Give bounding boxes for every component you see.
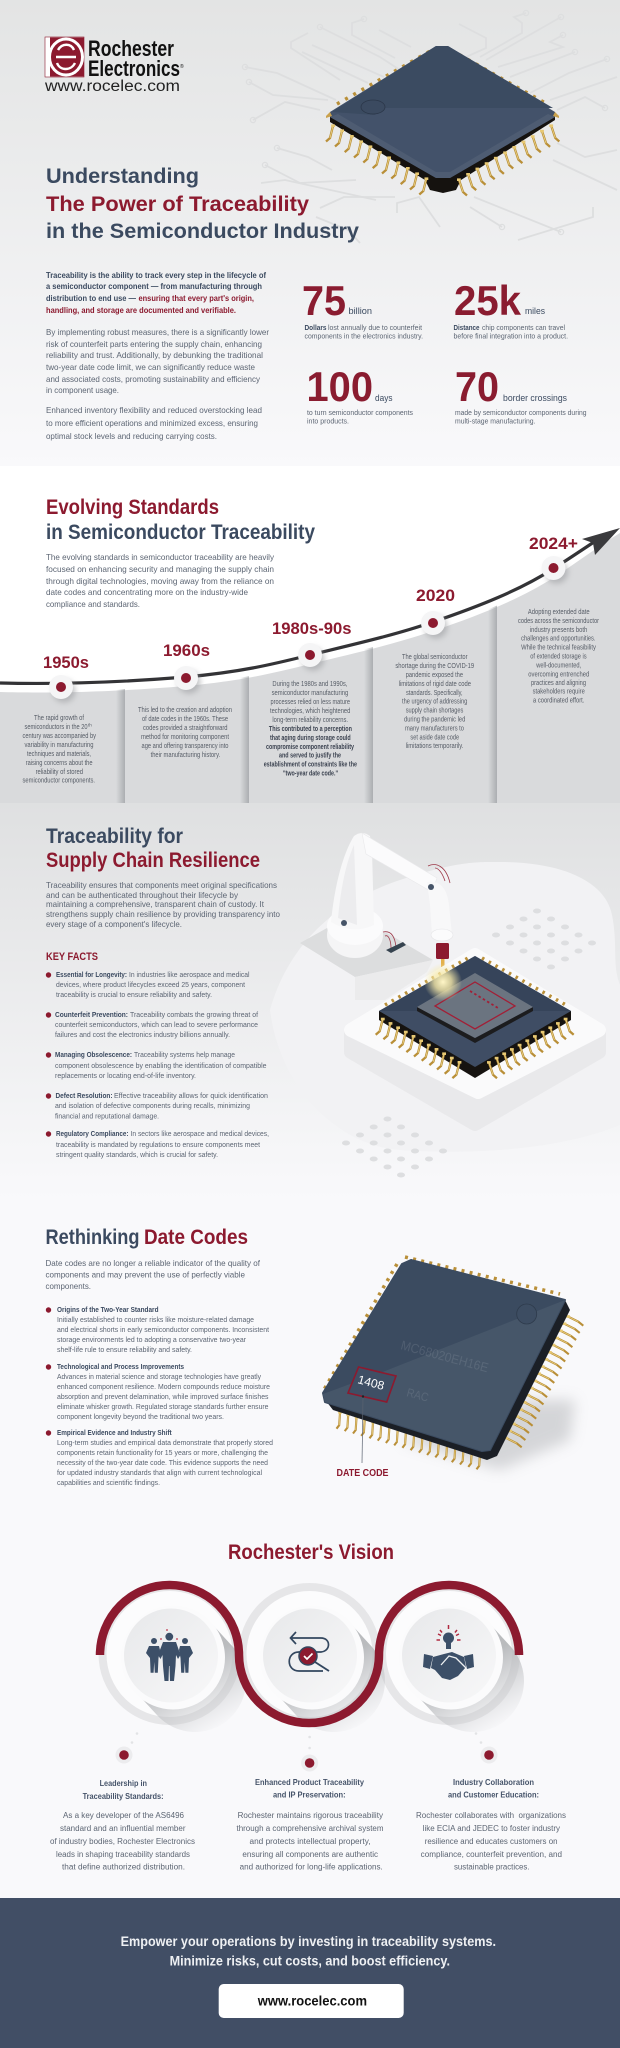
key fact: defect resolution: and isolation of defective components during recalls, minimizing: [55, 1101, 250, 1110]
timeline curve and arrow: [0, 528, 620, 688]
dot cluster lower: [342, 1116, 447, 1178]
timeline intro text: compliance and standards.: [46, 599, 140, 609]
stat: 25k miles: chip components can travel: [482, 323, 565, 332]
milestone: 2020: standards. Specifically,: [406, 690, 463, 697]
milestone: 1950s: century was accompanied by: [22, 733, 96, 740]
stat: 70 border crossings: multi-stage manufacturing.: [455, 416, 536, 426]
key fact: regulatory compliance: In sectors like aerospace and medical devices,: [130, 1129, 269, 1138]
milestone: 2020: shortage during the COVID-19: [395, 663, 474, 670]
supply chain intro text: strengthens supply chain resilience by providing transparency into: [46, 909, 280, 919]
disk: leadership icon: [121, 1606, 225, 1710]
milestone: 2020: set aside date code: [410, 734, 459, 742]
background blob: [270, 862, 620, 1152]
milestone: 2024+: codes across the semiconductor: [518, 618, 600, 625]
stat: 70 border crossings: 70: [455, 363, 499, 410]
bullet: empirical evidence: capabilities and scientific findings.: [57, 1478, 160, 1487]
stat: 75 billion: Dollars: [304, 323, 326, 332]
connector and text: industry collaboration: Rochester collaborates with organizations: [416, 1811, 566, 1820]
milestone: 1950s: variability in manufacturing: [24, 742, 94, 749]
supply chain intro text: and can be authenticated throughout their lifecycle by: [46, 890, 239, 900]
key fact: defect resolution: financial and reputational damage.: [55, 1112, 159, 1120]
supply chain intro text: [46, 880, 280, 929]
website button: www.rocelec.com: [257, 1994, 367, 2008]
connector and text: leadership: standard and an influential member: [60, 1824, 186, 1833]
key fact: longevity: traceability is crucial to ensure reliability and safety.: [56, 990, 212, 999]
milestone: 1950s: semiconductor components.: [22, 778, 95, 784]
connector and text: industry collaboration: resilience and educates customers on: [425, 1837, 558, 1846]
key facts heading: KEY FACTS: [46, 951, 98, 963]
key fact: longevity: [46, 970, 250, 999]
milestone: 1960s: age and offering transparency into: [142, 743, 229, 750]
heading: Rochester's Vision: [228, 1541, 394, 1564]
timeline intro text: date codes and concentrating more on the industry-wide: [46, 587, 248, 597]
milestone: 2020: limitations temporarily.: [406, 743, 463, 750]
intro text: a semiconductor component — from manufacturing through: [46, 281, 262, 291]
bullet: empirical evidence: necessity of the two-year date code. This evidence supports the need: [57, 1458, 268, 1467]
key fact: obsolescence: Managing Obsolescence:: [55, 1050, 132, 1059]
key fact: counterfeit prevention: failures and cost the electronics industry billions annually.: [55, 1030, 230, 1039]
stat: 25k miles: miles: [525, 306, 545, 317]
milestone: 2020: The global semiconductor: [402, 654, 468, 661]
stat: 100 days: days: [375, 393, 393, 404]
bullet: origins: storage environments led to adopting a conservative two-year: [57, 1335, 246, 1344]
milestone: 1980s-90s: compromise component reliability: [266, 744, 354, 751]
key fact: counterfeit prevention: Traceability combats the growing threat of: [130, 1010, 259, 1019]
heading: [46, 496, 315, 544]
intro text: handling, and storage are documented and verifiable.: [46, 305, 236, 315]
milestone: 1950s: [22, 654, 96, 784]
panel: intro header and stats: [0, 0, 620, 466]
connector and text: leadership: that define authorized distribution.: [62, 1862, 185, 1872]
milestone: 2020: many manufacturers to: [405, 726, 464, 732]
date code intro text: components and may prevent the use of perfectly viable: [46, 1270, 245, 1280]
milestone: 1960s: of date codes in the 1960s. These: [142, 716, 228, 723]
connector and text: product traceability: ensuring all components are authentic: [242, 1850, 378, 1859]
background circuit traces: [242, 10, 617, 243]
milestone: 2024+: Adopting extended date: [528, 609, 590, 616]
bullet: origins: and electrical shorts in early semiconductor components. Inconsistent: [57, 1325, 270, 1334]
intro text: risk of counterfeit parts entering the supply chain, enhancing: [46, 339, 262, 349]
key fact: obsolescence: component obsolescence by enabling the identification of compatible: [55, 1061, 266, 1070]
connector and text: industry collaboration: sustainable practices.: [454, 1862, 530, 1872]
connector and text: leadership: of industry bodies, Rochester Electronics: [50, 1837, 195, 1846]
key fact: defect resolution: Effective traceability allows for quick identification: [114, 1091, 268, 1100]
stat: 25k miles: before final integration into a product.: [454, 332, 568, 340]
intro text: [46, 270, 269, 441]
milestone: 1950s: techniques and materials,: [27, 751, 91, 758]
milestone: 2024+: of extended storage is: [530, 654, 587, 660]
dot cluster upper: [492, 908, 596, 970]
milestone: 1980s-90s: This contributed to a perception: [269, 726, 352, 733]
intro text: distribution to end use —: [46, 293, 137, 303]
milestone: 1980s-90s: long-term reliability concerns.: [272, 717, 348, 724]
key fact: longevity: Essential for Longevity:: [56, 970, 127, 979]
key fact: regulatory compliance: stringent quality standards, which is crucial for safety.: [56, 1150, 218, 1159]
milestone: 1980s-90s: semiconductor manufacturing: [272, 690, 348, 697]
stat: 100 days: to turn semiconductor components: [307, 408, 413, 417]
logo: Rochester: [88, 36, 174, 61]
logo: Electronics: [88, 56, 180, 81]
chip illustration: [326, 46, 559, 196]
milestone: 1960s: method for monitoring component: [141, 734, 229, 741]
key fact: obsolescence: [46, 1050, 266, 1080]
milestone: 1950s: 1950s: [43, 654, 89, 672]
milestone: 1980s-90s: During the 1980s and 1990s,: [272, 681, 347, 688]
call to action text: [121, 1933, 496, 1968]
bullet: technological improvements: [46, 1362, 270, 1421]
milestone: 2024+: industry presents both: [530, 627, 587, 634]
bullet: technological improvements: enhanced component resilience. Modern compounds reduce moisture: [57, 1382, 270, 1391]
milestone: 1960s: [138, 642, 232, 759]
connector and text: industry collaboration: like ECIA and JEDEC to foster industry: [423, 1824, 560, 1833]
connector and text: leadership: Traceability Standards:: [83, 1791, 164, 1801]
milestone: 1950s: semiconductors in the 20: [24, 724, 88, 731]
connector and text: industry collaboration: compliance, counterfeit prevention, and: [421, 1850, 562, 1859]
stat: 100 days: [306, 363, 413, 426]
connector and text: industry collaboration: and Customer Education:: [448, 1790, 539, 1800]
stat: 75 billion: [302, 277, 423, 340]
bullet: technological improvements: component longevity beyond the traditional two years.: [57, 1412, 224, 1421]
timeline intro text: through digital technologies, moving away from the reliance on: [46, 576, 274, 586]
connector and text: leadership: Leadership in: [100, 1778, 147, 1788]
milestone: 2020: 2020: [416, 587, 455, 605]
stat: 70 border crossings: [455, 363, 586, 426]
stat: 25k miles: Distance: [454, 323, 480, 332]
milestone: 1960s: This led to the creation and adoption: [138, 707, 232, 714]
milestone: 1980s-90s: establishment of constraints like the: [264, 762, 357, 768]
milestone: 1980s-90s: "two-year date code.": [283, 770, 338, 778]
bullet: empirical evidence: Long-term studies and empirical data demonstrate that properly stored: [57, 1438, 273, 1447]
stat: 75 billion: lost annually due to counterfeit: [328, 323, 422, 332]
logo: ®: [180, 63, 184, 70]
key fact: obsolescence: Traceability systems help manage: [134, 1050, 235, 1059]
milestone: 2020: the urgency of addressing: [402, 698, 467, 706]
milestone: 1980s-90s: processes relied on less mature: [270, 699, 350, 706]
intro text: Enhanced inventory flexibility and reduced overstocking lead: [46, 405, 262, 415]
milestone: 1980s-90s: 1980s-90s: [272, 620, 352, 638]
intro text: and associated costs, promoting sustainability and efficiency: [46, 374, 261, 384]
intro text: two-year date code limit, we can significantly reduce waste: [46, 362, 255, 372]
chip with date code: 1408: [356, 1372, 386, 1393]
panel: rethinking date codes: [46, 1226, 583, 1487]
chip with date code: [322, 1257, 583, 1479]
chip with date code: RAC: [405, 1385, 430, 1405]
stat: 70 border crossings: border crossings: [503, 393, 567, 404]
milestone: 1960s: codes provided a straightforward: [143, 725, 228, 732]
panel: traceability for supply chain resilience: [0, 803, 620, 1200]
bullet: origins: [46, 1305, 270, 1354]
supply chain intro text: every stage of a component's lifecycle.: [46, 919, 182, 929]
connector and text: product traceability: Rochester maintains rigorous traceability: [238, 1811, 383, 1820]
disk: traceability icon: [260, 1606, 364, 1710]
panel: footer call to action: [0, 1898, 620, 2048]
icon: three business people: [146, 1629, 193, 1681]
icon: handshake and lightbulb: [423, 1625, 474, 1680]
heading: Rethinking: [46, 1226, 140, 1249]
supply chain intro text: maintaining a comprehensive, transparent chain of custody. It: [46, 899, 265, 909]
stat: 75 billion: components in the electronics industry.: [304, 332, 423, 340]
intro text: optimal stock levels and reducing carrying costs.: [46, 431, 217, 441]
heading: Supply Chain Resilience: [46, 849, 260, 872]
connector and text: industry collaboration: Industry Collaboration: [453, 1777, 534, 1787]
disk: collaboration icon: [399, 1606, 503, 1710]
connector and text: leadership: leads in shaping traceability standards: [56, 1850, 190, 1859]
timeline intro text: [46, 552, 275, 609]
call to action text: Minimize risks, cut costs, and boost efficiency.: [170, 1952, 450, 1968]
milestone: 1980s-90s: technologies, which heightened: [270, 708, 350, 715]
date code intro text: components.: [46, 1281, 91, 1291]
panel: Rochester's vision: [50, 1541, 566, 1872]
intro text: ensuring that every part's origin,: [138, 293, 254, 303]
milestone: 2024+: While the technical feasibility: [521, 644, 596, 652]
bullet: technological improvements: absorption and prevent delamination, while improved surface finishes: [57, 1392, 269, 1401]
chip with date code: MC68020EH16E: [399, 1337, 490, 1375]
timeline intro text: focused on enhancing security and managing the supply chain: [46, 564, 274, 574]
robot arm base platform: [300, 928, 433, 1000]
connector and text: leadership: [50, 1732, 195, 1872]
key fact: regulatory compliance: Regulatory Compliance:: [56, 1129, 128, 1138]
connector and text: leadership: As a key developer of the AS6496: [63, 1811, 185, 1820]
platform and chip: [351, 955, 599, 1124]
connector and text: product traceability: Enhanced Product Traceability: [255, 1777, 364, 1787]
icon: route with magnifier and check: [289, 1632, 329, 1671]
heading: Evolving Standards: [46, 496, 219, 519]
logo: www.rocelec.com: [44, 78, 180, 95]
intro text: in component usage.: [46, 385, 119, 395]
key fact: counterfeit prevention: Counterfeit Prevention:: [55, 1010, 128, 1019]
stat: 75 billion: 75: [302, 277, 346, 324]
milestone: 2024+: stakeholders require: [533, 688, 585, 696]
milestone: 2024+: overcoming entrenched: [528, 672, 589, 678]
key fact: defect resolution: Defect Resolution:: [56, 1091, 112, 1100]
heading: [46, 1226, 248, 1249]
stat: 75 billion: billion: [348, 306, 372, 317]
title: [46, 165, 359, 243]
timeline columns: [0, 533, 620, 803]
milestone: 1980s-90s: [264, 620, 357, 778]
milestone: 1950s: th: [88, 722, 92, 728]
wave rings and disk shadows: [100, 1585, 519, 1723]
key fact: regulatory compliance: [46, 1129, 269, 1159]
milestone: 2024+: well-documented,: [535, 662, 581, 670]
intro text: reliability and trust. Additionally, by debunking the traditional: [46, 350, 263, 360]
bullet: origins: shelf-life rule to ensure reliability and safety.: [57, 1345, 192, 1354]
chip with date code: DATE CODE: [336, 1467, 388, 1479]
key fact: defect resolution: [46, 1091, 268, 1120]
stat: 25k miles: 25k: [454, 277, 522, 324]
heading: Traceability for: [46, 825, 183, 848]
key fact: obsolescence: replacements or locating end-of-life inventory.: [55, 1071, 196, 1080]
milestone: 2020: during the pandemic led: [404, 716, 465, 724]
bullet: technological improvements: Technological and Process Improvements: [57, 1362, 184, 1371]
intro text: Traceability is the ability to track every step in the lifecycle of: [46, 270, 266, 280]
title: The Power of Traceability: [46, 193, 309, 216]
milestone: 2024+: practices and aligning: [531, 680, 586, 687]
milestone: 1950s: reliability of stored: [36, 769, 83, 776]
milestone: 2020: supply chain shortages: [406, 708, 464, 714]
connector and text: product traceability: and authorized for long-life applications.: [240, 1862, 383, 1872]
panel: evolving standards timeline: [0, 466, 620, 803]
bullet: technological improvements: eliminate whisker growth. Regulated storage standards further ensure: [57, 1402, 268, 1411]
bullet: empirical evidence: Empirical Evidence and Industry Shift: [57, 1428, 172, 1437]
milestone: 2020: limitations of rigid date code: [399, 681, 471, 688]
milestone: 2020: [395, 587, 474, 750]
milestone: 2024+: 2024+: [529, 535, 578, 553]
stat: 100 days: into products.: [307, 416, 349, 426]
milestone: 1980s-90s: that aging during storage could: [270, 735, 351, 742]
bullet: origins: Initially established to counter risks like moisture-related damage: [57, 1315, 254, 1324]
website button: [219, 1984, 404, 2018]
bullet: empirical evidence: components retain functionality for 15 years or more, challenging the: [57, 1448, 268, 1457]
bullet: empirical evidence: for updated industry standards that align with current technological: [57, 1468, 262, 1477]
robot arm: [327, 833, 453, 967]
supply chain intro text: Traceability ensures that components meet original specifications: [46, 880, 277, 890]
bullet: origins: Origins of the Two-Year Standard: [57, 1305, 159, 1314]
milestone: 1960s: 1960s: [163, 642, 210, 660]
connector and text: product traceability: through a comprehensive archival system: [236, 1824, 384, 1833]
stat: 70 border crossings: made by semiconductor components during: [455, 408, 586, 417]
intro text: By implementing robust measures, there is a significantly lower: [46, 327, 269, 337]
milestone: 2020: pandemic exposed the: [406, 672, 463, 679]
key fact: regulatory compliance: traceability is mandated by regulations to ensure components meet: [56, 1140, 261, 1149]
connector and text: product traceability: [236, 1736, 384, 1872]
milestone: 2024+: challenges and opportunities.: [521, 636, 596, 642]
title: Understanding: [46, 165, 199, 188]
connector and text: product traceability: and protects intellectual property,: [250, 1837, 370, 1846]
stat: 100 days: 100: [306, 363, 373, 410]
bullet: empirical evidence: [46, 1428, 273, 1487]
date code intro text: [46, 1258, 261, 1291]
key fact: counterfeit prevention: [46, 1010, 259, 1039]
date code intro text: Date codes are no longer a reliable indicator of the quality of: [46, 1258, 261, 1268]
milestone: 1950s: raising concerns about the: [26, 760, 93, 767]
stat: 25k miles: [454, 277, 568, 340]
logo: [44, 36, 184, 95]
milestone: 2024+: [518, 535, 600, 704]
title: in the Semiconductor Industry: [46, 220, 359, 243]
milestone: 1960s: their manufacturing history.: [151, 752, 220, 759]
call to action text: Empower your operations by investing in traceability systems.: [121, 1933, 496, 1949]
milestone: 1980s-90s: and served to justify the: [279, 752, 341, 760]
timeline intro text: The evolving standards in semiconductor traceability are heavily: [46, 552, 275, 562]
milestone: 1950s: The rapid growth of: [34, 715, 84, 722]
key fact: longevity: In industries like aerospace and medical: [129, 970, 250, 979]
heading: Date Codes: [144, 1226, 248, 1249]
intro text: to more efficient operations and minimized excess, ensuring: [46, 418, 258, 428]
key fact: counterfeit prevention: counterfeit semiconductors, which can lead to severe performance: [55, 1020, 258, 1029]
connector and text: industry collaboration: [416, 1732, 566, 1872]
heading: [46, 825, 260, 872]
milestone: 2024+: a coordinated effort.: [533, 698, 584, 704]
bullet: technological improvements: Advances in material science and storage technologies have greatly: [57, 1372, 261, 1381]
heading: in Semiconductor Traceability: [46, 521, 315, 544]
key fact: longevity: devices, where product lifecycles exceed 25 years, component: [56, 980, 246, 989]
connector and text: product traceability: and IP Preservation:: [273, 1790, 346, 1800]
